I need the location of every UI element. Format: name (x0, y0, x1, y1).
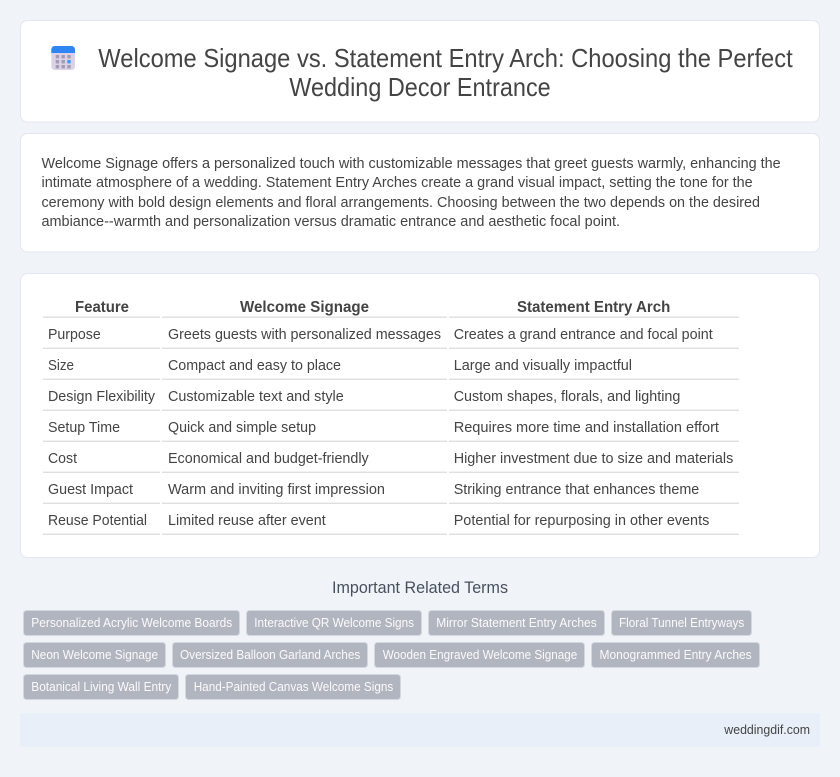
row: setup time: Quick and simple setup (168, 419, 316, 436)
tag (24, 674, 178, 700)
tag: Neon Welcome Signage (31, 647, 158, 662)
tag: Interactive QR Welcome Signs (254, 615, 414, 630)
tag (24, 610, 240, 636)
row: cost: Cost (48, 450, 78, 467)
tag: Mirror Statement Entry Arches (436, 615, 597, 630)
panel: intro text card (20, 134, 820, 252)
row: cost: Economical and budget-friendly (168, 450, 369, 467)
row: setup time: Requires more time and installation effort (454, 419, 720, 436)
tag (172, 642, 368, 668)
title (98, 45, 793, 102)
intro paragraph: ceremony with bold design elements and floral arrangements. Choosing between the two depends on the desired (42, 194, 760, 211)
tag: Oversized Balloon Garland Arches (180, 647, 360, 662)
table (43, 299, 739, 535)
tag: Personalized Acrylic Welcome Boards (31, 615, 232, 630)
panel: comparison table card (20, 274, 820, 558)
icon: calendar (51, 46, 75, 70)
tag: Floral Tunnel Entryways (619, 615, 744, 630)
row: reuse potential: Potential for repurposing in other events (454, 512, 709, 529)
row: size: Large and visually impactful (454, 357, 632, 374)
row: reuse potential (43, 512, 739, 535)
row: reuse potential: Limited reuse after event (168, 512, 326, 529)
table header row: Feature (75, 299, 129, 316)
row: size: Compact and easy to place (168, 357, 341, 374)
row: guest impact: Guest Impact (48, 481, 134, 498)
tag (186, 674, 400, 700)
intro paragraph (42, 155, 781, 230)
intro paragraph: intimate atmosphere of a wedding. Statement Entry Arches create a grand visual impact, setting the tone for the (42, 174, 753, 191)
table header row: Statement Entry Arch (517, 299, 670, 316)
row: setup time (43, 419, 739, 442)
tag (246, 610, 422, 636)
tag (428, 610, 604, 636)
intro paragraph: Welcome Signage offers a personalized touch with customizable messages that greet guests warmly, enhancing the (42, 155, 781, 172)
row: design flexibility: Customizable text and style (168, 388, 344, 405)
row: purpose: Greets guests with personalized messages (168, 326, 441, 343)
row: purpose (43, 326, 739, 349)
tag: Monogrammed Entry Arches (600, 647, 752, 662)
row: size: Size (48, 357, 74, 374)
footer source text: weddingdif.com (723, 722, 810, 737)
tag (592, 642, 760, 668)
tag: Hand-Painted Canvas Welcome Signs (194, 679, 393, 694)
row: purpose: Purpose (48, 326, 101, 343)
row: design flexibility (43, 388, 739, 411)
row: size (43, 357, 739, 380)
tag (374, 642, 584, 668)
intro paragraph: ambiance--warmth and personalization versus dramatic entrance and aesthetic focal point. (42, 213, 620, 230)
table header row: Welcome Signage (240, 299, 369, 316)
tag: Wooden Engraved Welcome Signage (383, 647, 577, 662)
row: guest impact (43, 481, 739, 504)
row: guest impact: Warm and inviting first impression (168, 481, 385, 498)
tag: Botanical Living Wall Entry (31, 679, 172, 694)
row: cost (43, 450, 739, 473)
row: design flexibility: Custom shapes, florals, and lighting (454, 388, 680, 405)
heading: important related terms: Important Related Terms (332, 578, 508, 597)
row: cost: Higher investment due to size and materials (454, 450, 733, 467)
row: guest impact: Striking entrance that enhances theme (454, 481, 699, 498)
row: design flexibility: Design Flexibility (48, 388, 155, 405)
row: reuse potential: Reuse Potential (48, 512, 147, 529)
tag (24, 642, 166, 668)
row: setup time: Setup Time (48, 419, 120, 436)
title: Wedding Decor Entrance (289, 74, 551, 102)
row: purpose: Creates a grand entrance and focal point (454, 326, 713, 343)
title: Welcome Signage vs. Statement Entry Arch: Choosing the Perfect (98, 45, 793, 73)
panel: title card (20, 20, 820, 122)
related term tags (24, 610, 760, 700)
table header row (43, 299, 739, 318)
footer bar (20, 713, 820, 747)
tag (612, 610, 752, 636)
